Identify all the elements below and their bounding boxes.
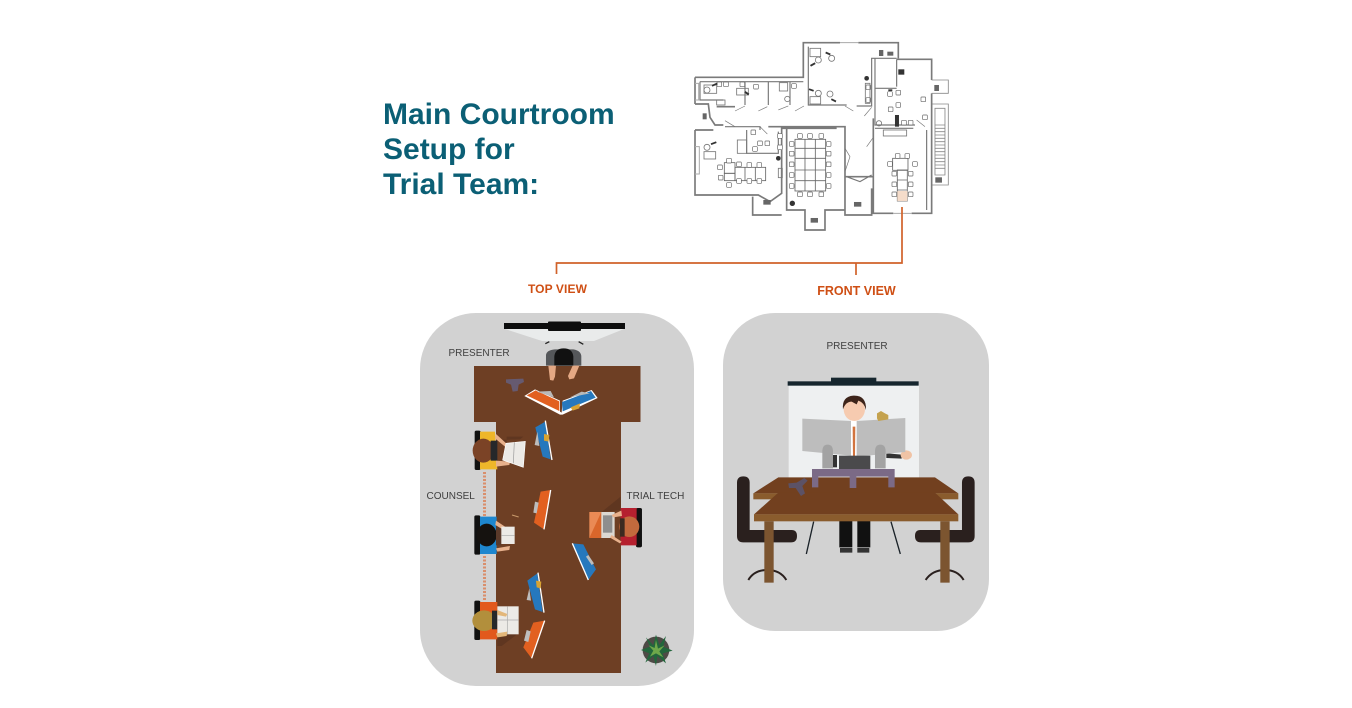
webcam [877, 411, 888, 421]
monitors pair [524, 389, 598, 415]
presenter figure [545, 342, 583, 381]
counsel 2 [474, 515, 519, 555]
monitor 5 [527, 573, 544, 613]
outer walls [695, 43, 932, 230]
connector lines [556, 207, 902, 275]
chairs [717, 82, 927, 197]
table [753, 477, 958, 583]
presenter body [832, 396, 912, 467]
monitor 6 [523, 621, 545, 658]
title [383, 98, 615, 201]
inner walls [700, 47, 927, 210]
title: Setup for [383, 133, 515, 166]
chair bases [748, 570, 964, 580]
door swings [725, 106, 925, 172]
screen [504, 322, 625, 341]
conference phone [506, 379, 524, 392]
label: front view: FRONT VIEW [817, 284, 896, 298]
office desks [704, 48, 907, 178]
conference phone [788, 478, 808, 496]
trial tech [589, 497, 642, 547]
monitor 2 [535, 421, 552, 460]
monitor stand [812, 469, 895, 488]
monitor 4 [572, 543, 596, 580]
highlighted table end [897, 191, 907, 201]
monitors front [802, 418, 905, 470]
windows [695, 43, 912, 213]
floor plan [695, 43, 948, 230]
projection screen [788, 378, 919, 479]
counsel label: COUNSEL [426, 491, 475, 502]
chairs [737, 476, 975, 542]
trial tech label: TRIAL TECH [626, 491, 684, 502]
presenter label: PRESENTER [826, 341, 888, 352]
label: top view: TOP VIEW [528, 282, 588, 296]
plant [641, 635, 673, 666]
cable ruler [483, 472, 486, 600]
panel: top view [420, 313, 694, 686]
counsel 1 [473, 431, 525, 470]
presenter label: PRESENTER [448, 348, 510, 359]
presenter legs [806, 520, 900, 554]
title: Main Courtroom [383, 98, 615, 131]
table [474, 366, 640, 673]
panel: front view [723, 313, 989, 631]
plants and dark fixtures [703, 50, 942, 223]
conference tables [724, 139, 908, 201]
title: Trial Team: [383, 168, 539, 201]
counsel 3 [472, 601, 519, 646]
monitor 3 [533, 490, 551, 529]
staircase [932, 80, 948, 185]
